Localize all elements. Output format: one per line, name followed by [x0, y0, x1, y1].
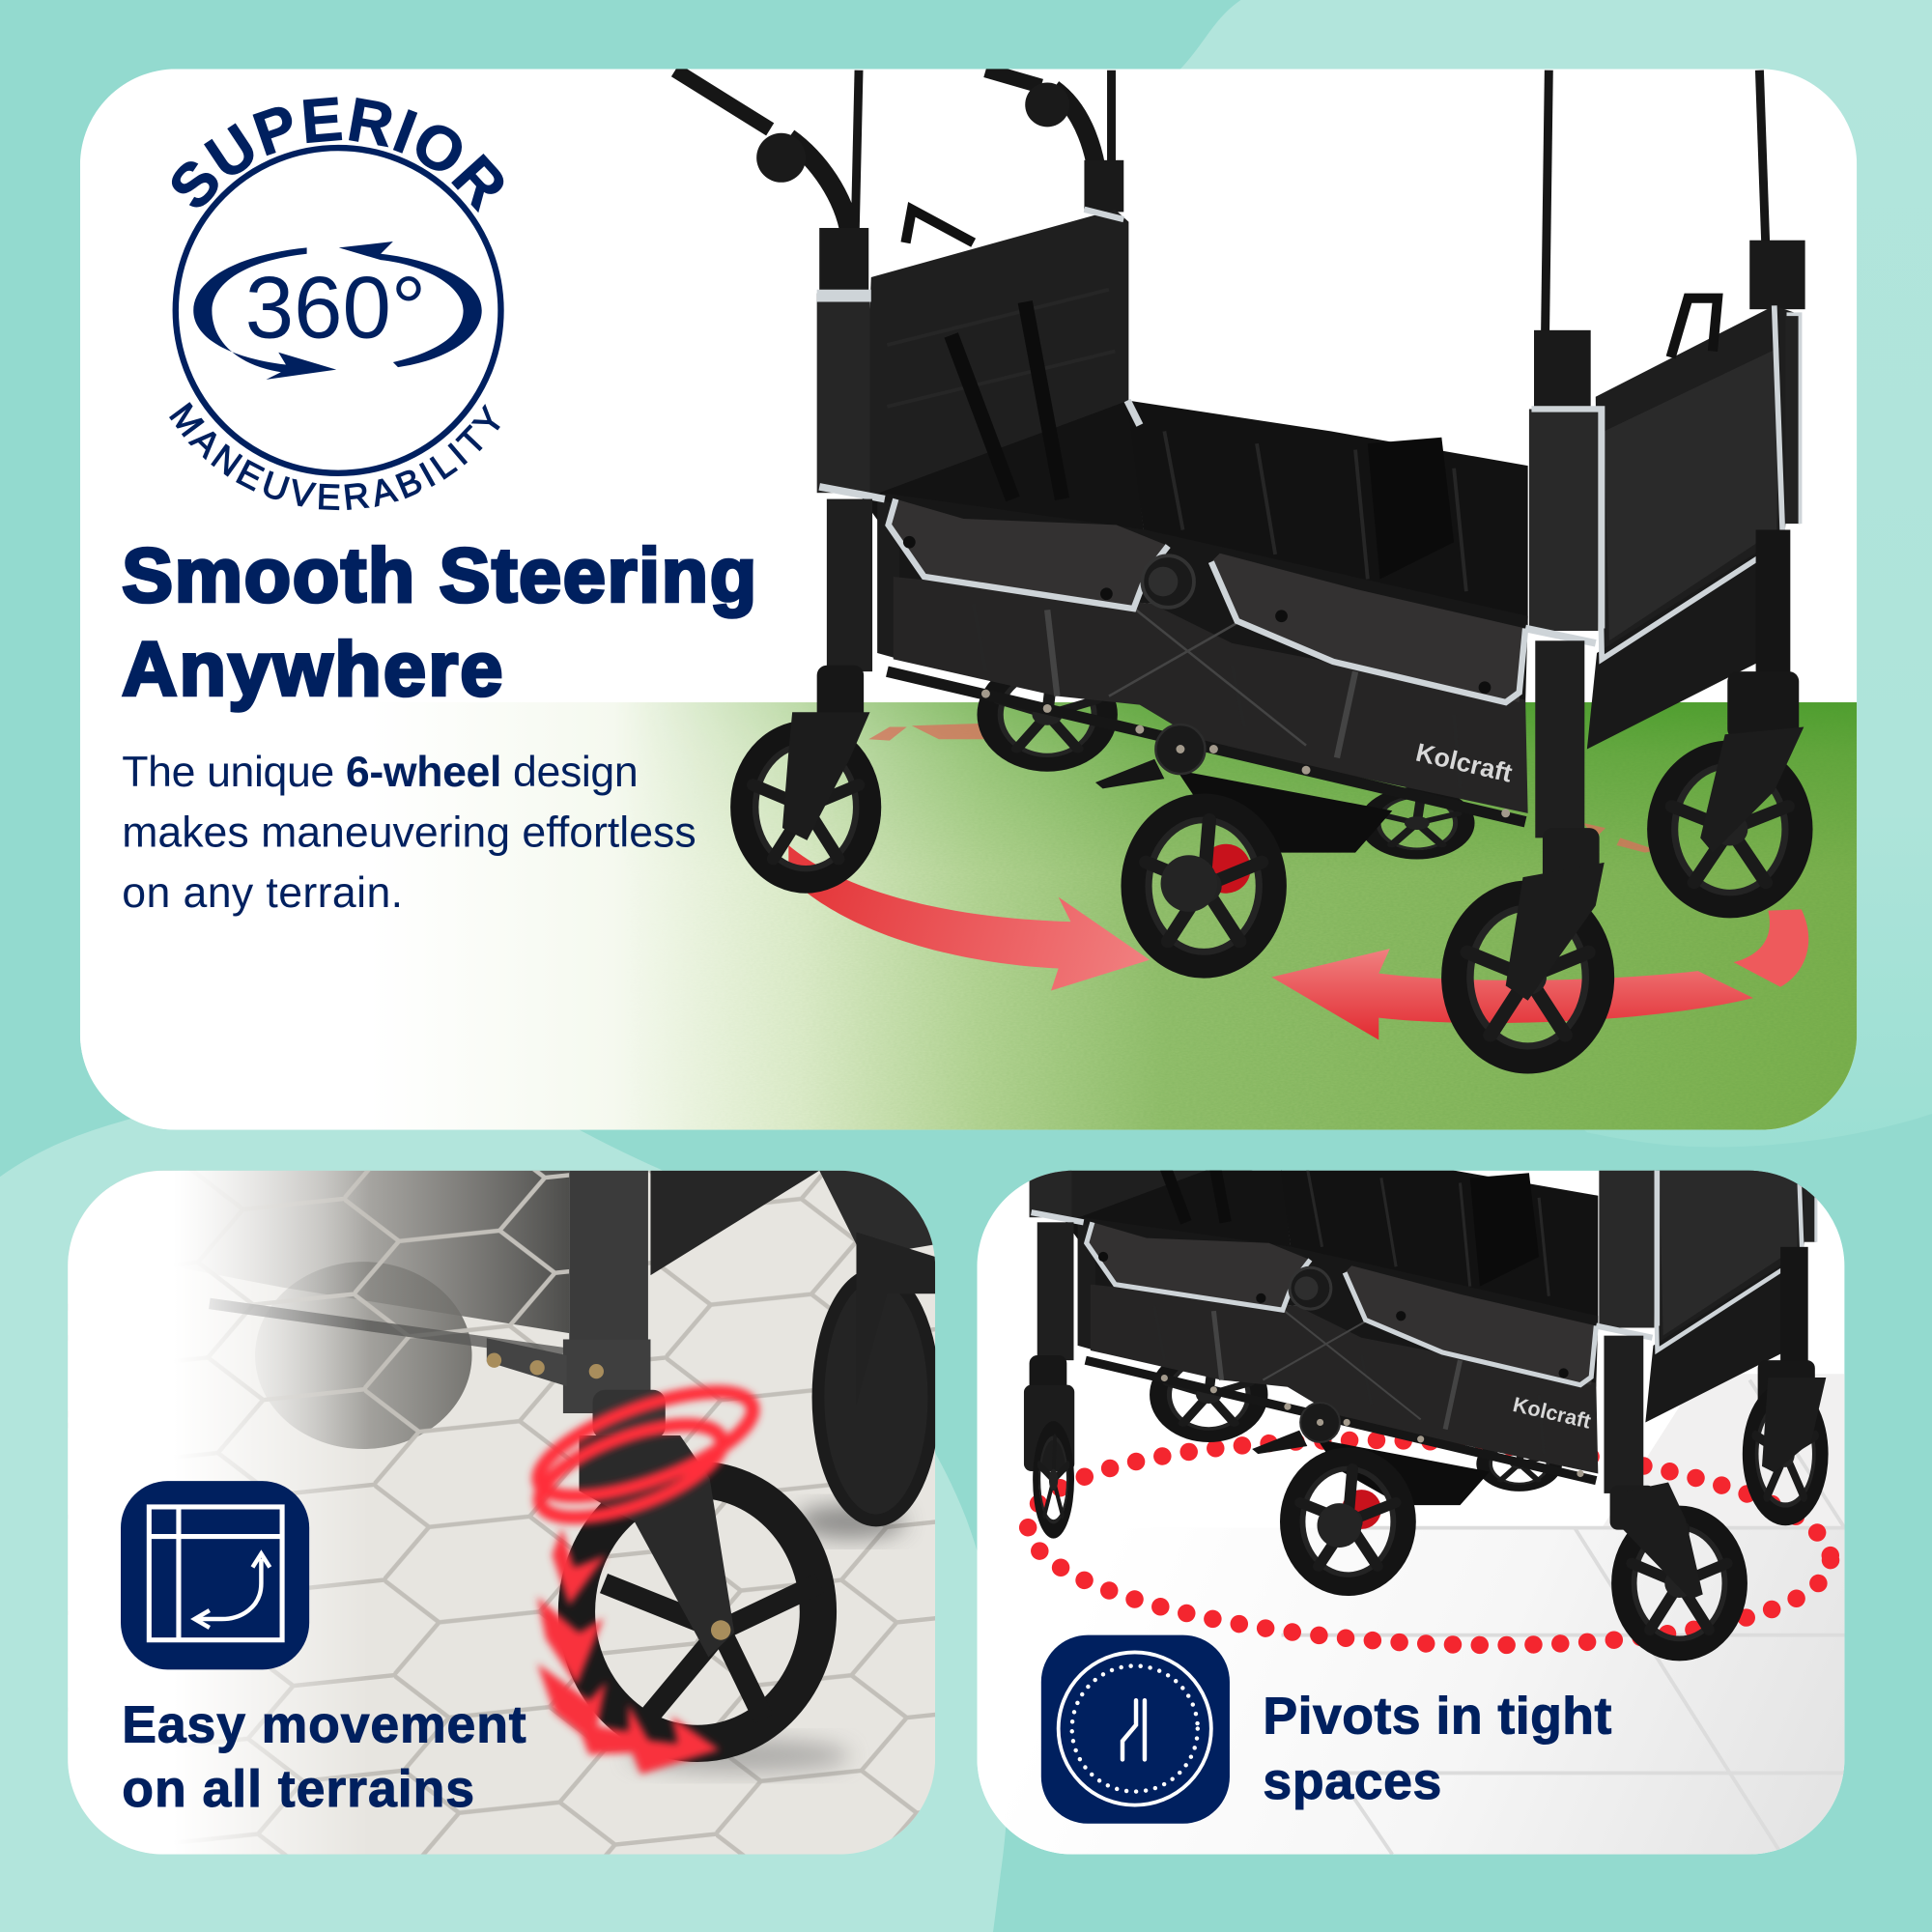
label: pivots in tight spaces [1263, 1689, 1612, 1810]
body text [122, 749, 696, 917]
paver hex lines [68, 1171, 935, 1855]
body text: on any terrain. [122, 869, 403, 917]
white fade [68, 1171, 388, 1855]
360 degree label: 360° [245, 259, 426, 356]
red motion chevrons [537, 1528, 720, 1775]
tile floor [977, 1374, 1844, 1855]
panel background [977, 1171, 1844, 1855]
handle knobs and connectors [756, 82, 1805, 412]
small wagon body [1030, 991, 1816, 1530]
red turn arrow left [788, 845, 1150, 991]
red dotted turning circle [1024, 1424, 1835, 1662]
label: pivots in tight spaces: Pivots in tight [1263, 1689, 1612, 1746]
body text: The unique 6-wheel design [122, 749, 639, 796]
front wheel fork [579, 1435, 734, 1658]
red turn arrow right [1271, 949, 1753, 1040]
paver ground [68, 1171, 935, 1855]
label: easy movement [122, 1697, 526, 1818]
dark fabric top right [650, 1171, 819, 1275]
background: light wave top right [1180, 0, 1932, 1148]
background: light wave bottom left [0, 1084, 1009, 1932]
far rear red arrow [868, 724, 1658, 853]
heading: Smooth Steering [122, 531, 756, 617]
badge circle [176, 148, 500, 473]
label: easy movement: Easy movement [122, 1697, 526, 1754]
small wagon wheels [1024, 1378, 1826, 1651]
background wheel and bracket [795, 1171, 935, 1539]
badge: 360 superior maneuverability [169, 97, 504, 510]
grass ground [80, 702, 1857, 1130]
label: pivots in tight spaces: spaces [1263, 1753, 1441, 1810]
wagon wheels [742, 732, 1801, 1062]
wagon leg [487, 1171, 666, 1439]
panel: smooth steering [80, 69, 1857, 1130]
badge top text: SUPERIOR [172, 97, 504, 213]
ghost wagon body [231, 1171, 570, 1333]
rotation arrow right [339, 242, 482, 367]
badge bottom text: MANEUVERABILITY [169, 402, 500, 510]
ghost rear wheel [255, 1262, 472, 1449]
icon: tight road [1041, 1635, 1230, 1824]
label: easy movement: on all terrains [122, 1761, 474, 1818]
body text: makes maneuvering effortless [122, 809, 696, 856]
heading [122, 531, 756, 711]
wheel axle bolt [711, 1620, 730, 1640]
icon: movement path [121, 1481, 309, 1669]
red spin rings [526, 1371, 765, 1537]
wagon body [817, 210, 1801, 884]
red arrow tail right [1734, 909, 1808, 987]
panel background [80, 69, 1857, 1130]
Kolcraft logo small: Kolcraft [1511, 1392, 1593, 1434]
wheel forks [782, 712, 1804, 1001]
wheel ground shadow [629, 1739, 850, 1773]
front wheel [577, 1480, 819, 1744]
far hidden wheels [987, 665, 1466, 855]
hidden back wheels small [1158, 1353, 1555, 1488]
panel: easy movement [68, 1171, 935, 1855]
rotation arrow left [193, 247, 336, 380]
panel: pivots in tight spaces [977, 991, 1844, 1855]
heading: Anywhere [122, 625, 502, 711]
Kolcraft logo: Kolcraft [1413, 738, 1515, 788]
ghost frame bar [210, 1303, 563, 1353]
wagon handles and poles [675, 71, 1766, 339]
